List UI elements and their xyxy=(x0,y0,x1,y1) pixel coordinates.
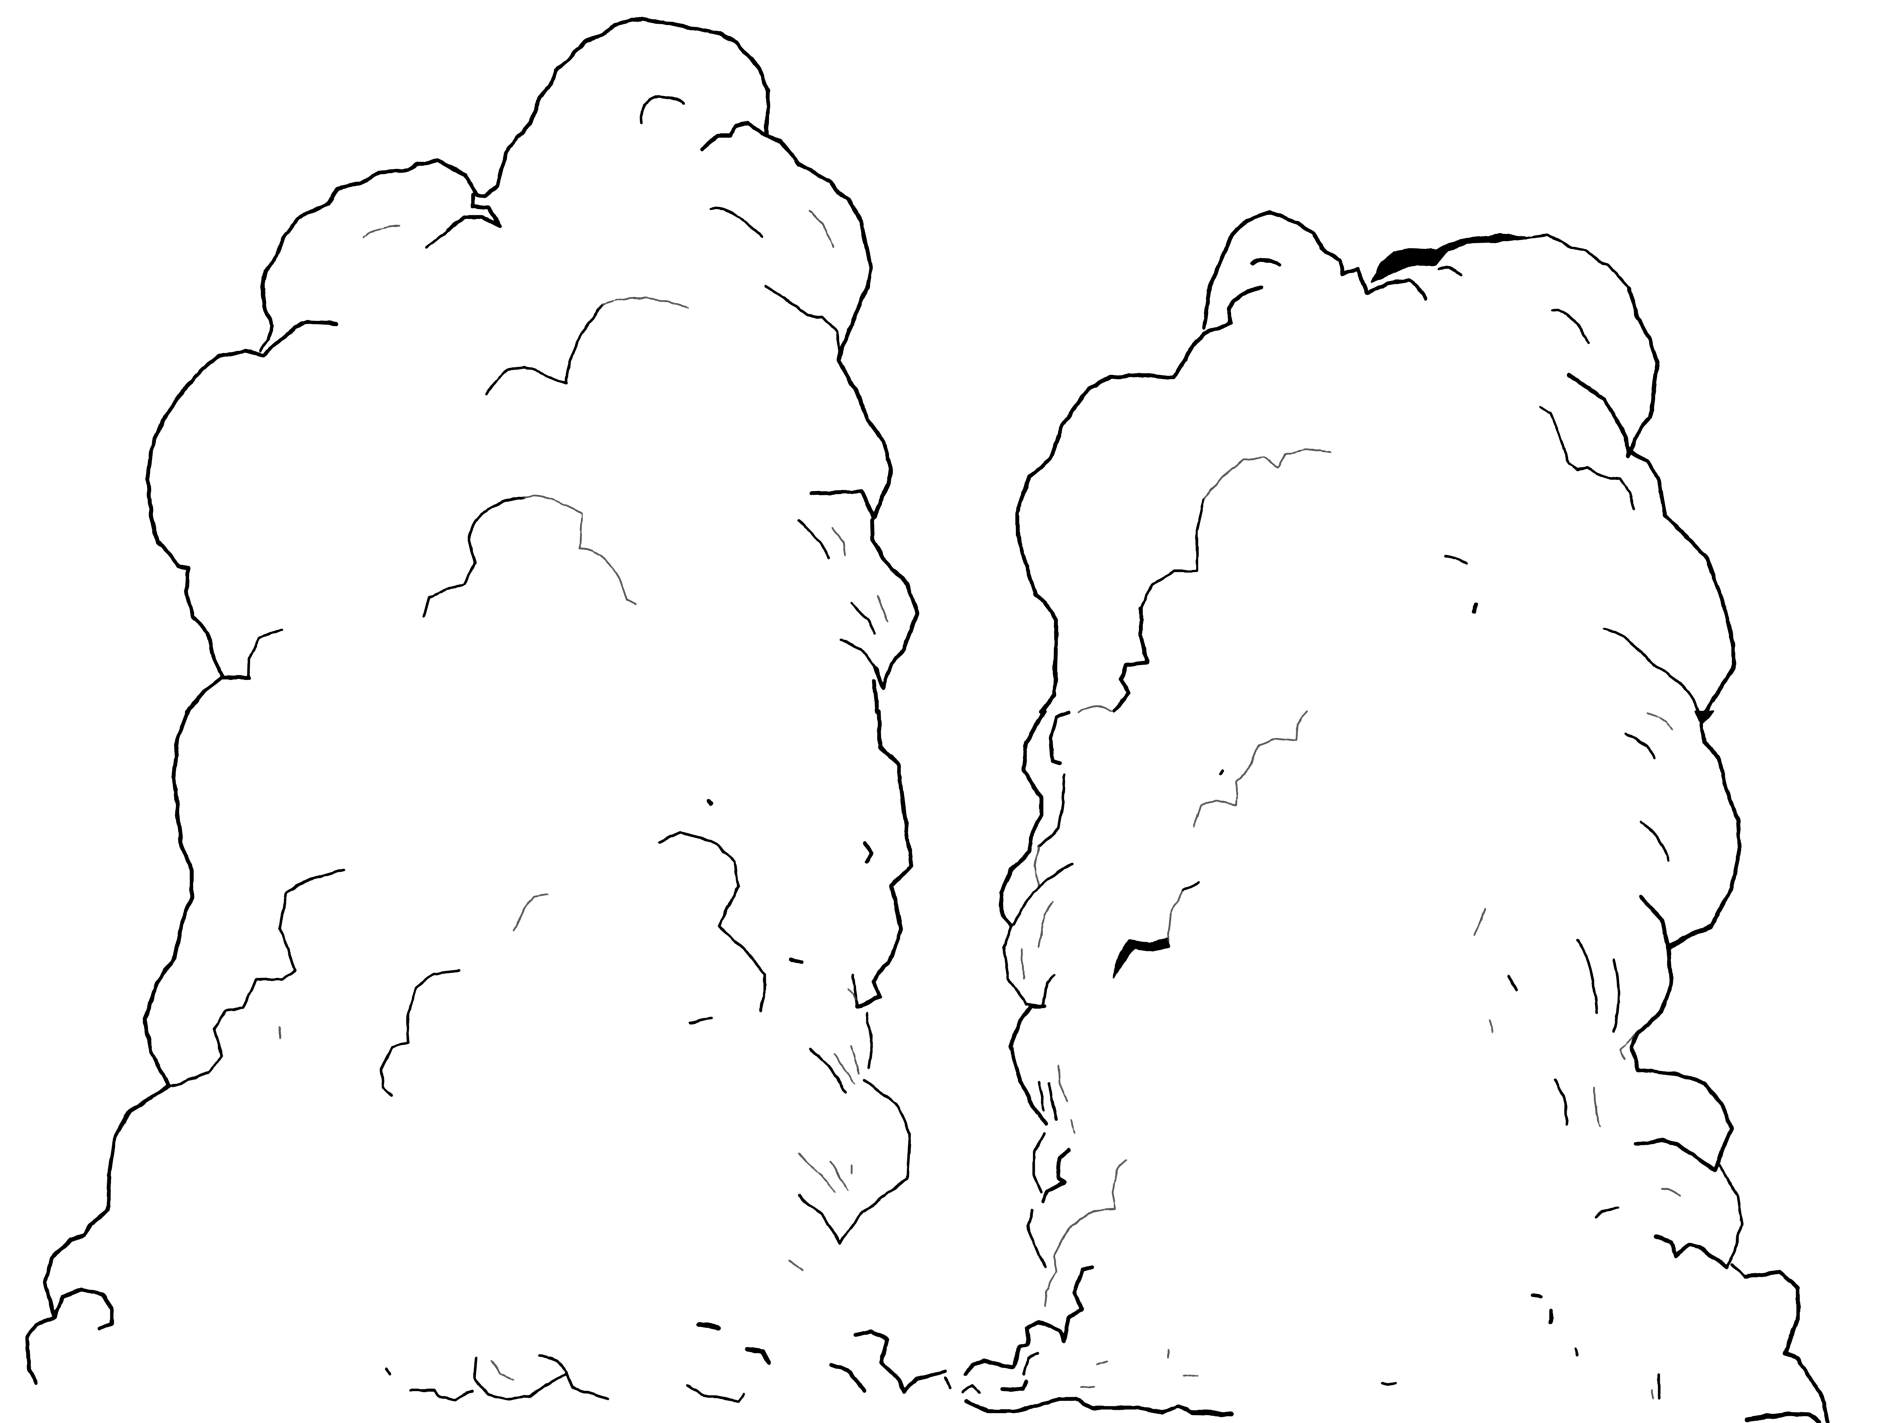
right cloud xyxy=(945,213,1828,1423)
left cloud xyxy=(27,18,945,1401)
left cloud lower linework xyxy=(27,711,945,1401)
right cloud upper linework xyxy=(1017,213,1733,712)
right cloud lower linework xyxy=(945,711,1828,1423)
left cloud upper linework xyxy=(148,18,917,712)
